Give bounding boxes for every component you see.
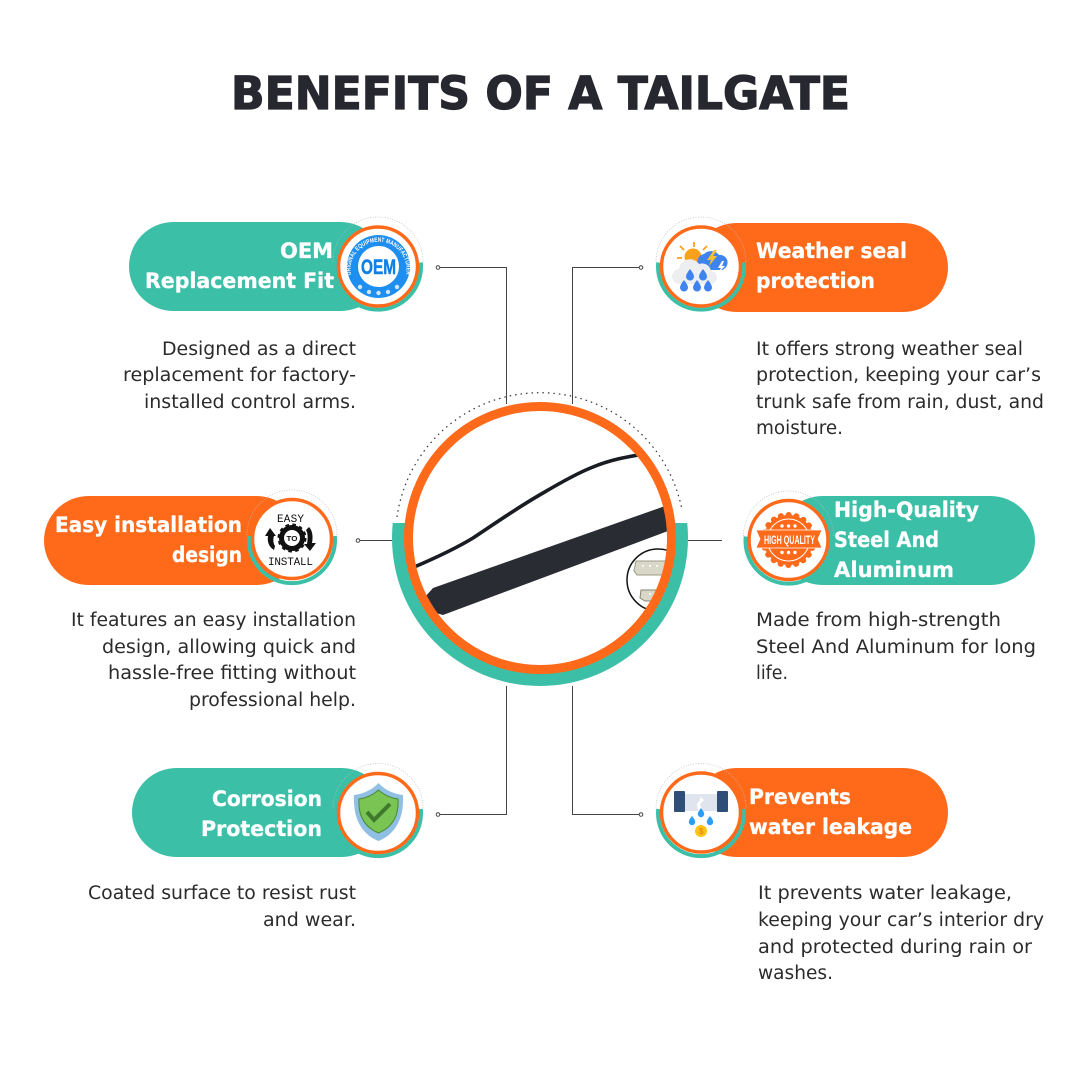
text block: weather description [756, 339, 1044, 439]
heading: prevents water leakage: Prevents [749, 785, 851, 809]
panel: high-quality steel and aluminum [744, 491, 1036, 684]
heading: easy installation design [55, 513, 242, 567]
text block: OEM description: replacement for factory- [123, 365, 356, 386]
heading: high-quality steel and aluminum: Aluminum [834, 558, 954, 582]
text block: easy installation description: professional help. [189, 690, 356, 711]
icon: leaking pipe [656, 764, 746, 856]
panel: OEM replacement fit [123, 216, 424, 413]
text block: high quality description: life. [756, 663, 788, 684]
heading: corrosion protection [201, 787, 322, 841]
text block: water leakage description: It prevents water leakage, [758, 883, 1012, 904]
pill: corrosion [132, 768, 386, 857]
text block: water leakage description: keeping your car’s interior dry [758, 910, 1044, 931]
pill: weather seal [692, 223, 948, 312]
pill: water leakage [692, 768, 948, 857]
text block: water leakage description: and protected during rain or [758, 937, 1032, 958]
heading: corrosion protection: Protection [201, 817, 322, 841]
text block: high quality description [756, 610, 1036, 684]
text block: corrosion description: Coated surface to resist rust [88, 883, 356, 904]
icon: OEM badge [332, 216, 424, 312]
icon: high quality badge: HIGH QUALITY [764, 533, 815, 547]
heading: prevents water leakage [749, 785, 912, 839]
heading: weather seal protection [756, 239, 907, 293]
text block: easy installation description [71, 610, 356, 711]
connector lines [356, 266, 722, 816]
heading: easy installation design: design [172, 543, 242, 567]
icon: high quality badge [744, 491, 834, 584]
heading: OEM replacement fit: OEM [280, 239, 333, 263]
text block: high quality description: Made from high-strength [756, 610, 1001, 631]
icon: OEM badge: ORIGINAL EQUIPMENT MANUFACTURER [347, 237, 410, 276]
heading: high-quality steel and aluminum: High-Quality [834, 498, 979, 522]
text block: OEM description [123, 339, 356, 413]
heading: OEM replacement fit [145, 239, 334, 293]
text block: water leakage description: washes. [758, 963, 833, 984]
text block: easy installation description: It features an easy installation [71, 610, 356, 631]
text block: OEM description: installed control arms. [144, 392, 356, 413]
heading: high-quality steel and aluminum [834, 498, 979, 582]
pill: high quality [778, 496, 1035, 585]
title: BENEFITS OF A TAILGATE [231, 67, 850, 120]
icon: easy to install: EASY [277, 514, 304, 526]
text block: high quality description: Steel And Aluminum for long [756, 637, 1036, 658]
heading: weather seal protection: protection [756, 269, 875, 293]
icon: leaking pipe: $ [699, 827, 704, 836]
text block: corrosion description [88, 883, 356, 931]
icon: weather [656, 217, 746, 310]
text block: corrosion description: and wear. [263, 910, 356, 931]
panel: easy installation design [44, 490, 356, 711]
icon: easy to install: TO [286, 536, 298, 543]
text block: water leakage description [758, 883, 1044, 984]
panel: weather seal protection [656, 217, 1044, 439]
heading: prevents water leakage: water leakage [749, 815, 912, 839]
text block: weather description: protection, keeping your car’s [756, 365, 1041, 386]
heading: weather seal protection: Weather seal [756, 239, 907, 263]
icon: easy to install: INSTALL [268, 557, 313, 569]
text block: weather description: trunk safe from rain, dust, and [756, 392, 1044, 413]
heading: corrosion protection: Corrosion [212, 787, 322, 811]
text block: weather description: It offers strong weather seal [756, 339, 1023, 360]
heading: high-quality steel and aluminum: Steel And [834, 528, 939, 552]
panel: corrosion protection [88, 764, 423, 931]
heading: OEM replacement fit: Replacement Fit [145, 269, 334, 293]
text block: weather description: moisture. [756, 418, 843, 439]
pill: easy installation [44, 496, 301, 585]
text block: easy installation description: hassle-free fitting without [108, 663, 356, 684]
text block: OEM description: Designed as a direct [162, 339, 356, 360]
icon: OEM badge: OEM [361, 256, 396, 279]
icon: shield [333, 764, 423, 856]
pill: OEM [129, 222, 385, 311]
central product image [392, 390, 689, 686]
heading: easy installation design: Easy installation [55, 513, 242, 537]
icon: easy to install [247, 490, 337, 583]
text block: easy installation description: design, allowing quick and [102, 637, 356, 658]
panel: prevents water leakage [656, 764, 1044, 984]
